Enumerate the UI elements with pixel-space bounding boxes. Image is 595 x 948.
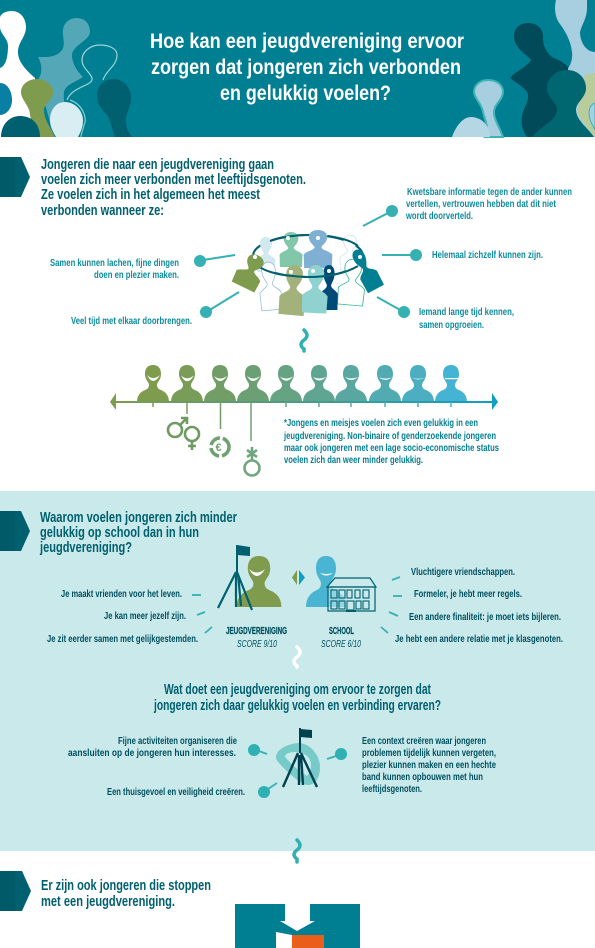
- heading: voelen zich meer verbonden met leeftijdsgenoten.: [41, 171, 306, 188]
- callout: context creëren: problemen tijdelijk kunnen vergeten,: [362, 747, 496, 759]
- icon: gender male female: [168, 418, 199, 450]
- heading: [41, 877, 211, 910]
- icon: section marker: [0, 157, 30, 197]
- list: jeugdvereniging benefits: [47, 588, 212, 645]
- callout: kwetsbare informatie: [363, 186, 572, 226]
- heading: Ze voelen zich in het algemeen het meest: [41, 186, 260, 203]
- label: school score: SCORE 6/10: [321, 638, 361, 650]
- title: zorgen dat jongeren zich verbonden: [151, 56, 461, 79]
- title: Hoe kan een jeugdvereniging ervoor: [150, 30, 464, 53]
- heading: Waarom voelen jongeren zich minder: [40, 509, 237, 526]
- squiggle connector white: [294, 647, 300, 667]
- callout: samen lachen: doen en plezier maken.: [94, 269, 179, 281]
- heading: jeugdvereniging?: [39, 539, 132, 556]
- people illustration right: [452, 0, 595, 137]
- footnote text: voelen zich dan weer minder gelukkig.: [284, 454, 423, 466]
- panel: stoppen: [0, 871, 360, 948]
- icon: comparison arrows: [292, 570, 305, 585]
- footnote text: [283, 417, 499, 466]
- callout: samen lachen: [50, 255, 235, 281]
- header banner: [0, 0, 595, 137]
- label: jeugdvereniging score: SCORE 9/10: [237, 638, 277, 650]
- icon: person and school building: [306, 556, 376, 612]
- panel: school versus jeugdvereniging: [0, 491, 595, 851]
- label: school score: SCHOOL: [329, 625, 354, 637]
- icon: euro socio-economic: €: [216, 442, 222, 454]
- illustration: people in a ring: [231, 230, 384, 316]
- heading: met een jeugdvereniging.: [41, 893, 175, 910]
- callout: context creëren: [327, 735, 496, 795]
- icon: exit door box: [235, 904, 360, 948]
- list: jeugdvereniging benefits: Je maakt vrienden voor het leven.: [61, 588, 182, 600]
- heading: Er zijn ook jongeren die stoppen: [41, 877, 211, 894]
- icon: flag in ring: [276, 728, 320, 787]
- callout: activiteiten: Fijne activiteiten organiseren die: [118, 735, 237, 747]
- subheading: jongeren zich daar gelukkig voelen en verbinding ervaren?: [153, 697, 441, 714]
- subheading: Wat doet een jeugdvereniging om ervoor te zorgen dat: [164, 681, 431, 698]
- icon: non-binary symbol: [244, 447, 260, 476]
- callout: veel tijd: [71, 292, 239, 327]
- list: school drawbacks: Vluchtigere vriendschappen.: [411, 566, 515, 578]
- footnote text: *Jongens en meisjes voelen zich even gelukkig in een: [284, 417, 478, 429]
- heading: [41, 156, 306, 219]
- callout: context creëren: leeftijdsgenoten.: [362, 783, 422, 795]
- people illustration left: [0, 11, 132, 137]
- label: school score: [321, 625, 361, 650]
- callout: veel tijd: Veel tijd met elkaar doorbrengen.: [71, 315, 192, 327]
- callout: helemaal zichzelf: [382, 249, 543, 261]
- heading: Jongeren die naar een jeugdvereniging gaan: [41, 156, 274, 173]
- callout: lange tijd kennen: [377, 297, 514, 331]
- callout: samen lachen: Samen kunnen lachen, fijne dingen: [50, 257, 179, 269]
- footnote text: maar ook jongeren met een lage socio-economische status: [284, 442, 499, 454]
- callout: lange tijd kennen: Iemand lange tijd kennen,: [419, 306, 514, 318]
- panel: verbonden: [0, 156, 572, 476]
- callout: context creëren: band kunnen opbouwen met hun: [362, 771, 483, 783]
- icon: section marker: [0, 871, 31, 911]
- footnote text: jeugdvereniging. Non-binaire of genderzoekende jongeren: [283, 430, 496, 442]
- heading: gelukkig op school dan in hun: [40, 524, 199, 541]
- happiness scale with ten people: [110, 365, 498, 476]
- callout: kwetsbare informatie: wordt doorverteld.: [405, 210, 473, 222]
- heading: [39, 509, 237, 556]
- list: school drawbacks: Formeler, je hebt meer regels.: [414, 588, 522, 600]
- icon: euro socio-economic: [211, 438, 229, 456]
- icon: section marker: [0, 511, 30, 551]
- label: jeugdvereniging score: JEUGDVERENIGING: [226, 625, 287, 637]
- title: [150, 30, 464, 105]
- callout: context creëren: Een context creëren waar jongeren: [362, 735, 486, 747]
- callout: activiteiten: [68, 735, 267, 759]
- squiggle connector teal: [294, 840, 300, 862]
- list: jeugdvereniging benefits: Je kan meer jezelf zijn.: [104, 610, 186, 622]
- title: en gelukkig voelen?: [220, 82, 391, 105]
- heading: verbonden wanneer ze:: [41, 202, 164, 219]
- squiggle connector: [301, 330, 307, 351]
- icon: flag and person, jeugdvereniging: [218, 545, 281, 610]
- list: jeugdvereniging benefits: Je zit eerder samen met gelijkgestemden.: [47, 633, 198, 645]
- callout: thuisgevoel: Een thuisgevoel en veiligheid creëren.: [107, 786, 245, 798]
- callout: context creëren: plezier kunnen maken en een hechte: [362, 759, 496, 771]
- callout: lange tijd kennen: samen opgroeien.: [419, 319, 484, 331]
- list: school drawbacks: [381, 566, 563, 645]
- callout: helemaal zichzelf: Helemaal zichzelf kunnen zijn.: [432, 249, 543, 261]
- subheading: [153, 681, 441, 714]
- label: jeugdvereniging score: [226, 625, 287, 650]
- callout: activiteiten: aansluiten op de jongeren hun interesses.: [68, 747, 236, 759]
